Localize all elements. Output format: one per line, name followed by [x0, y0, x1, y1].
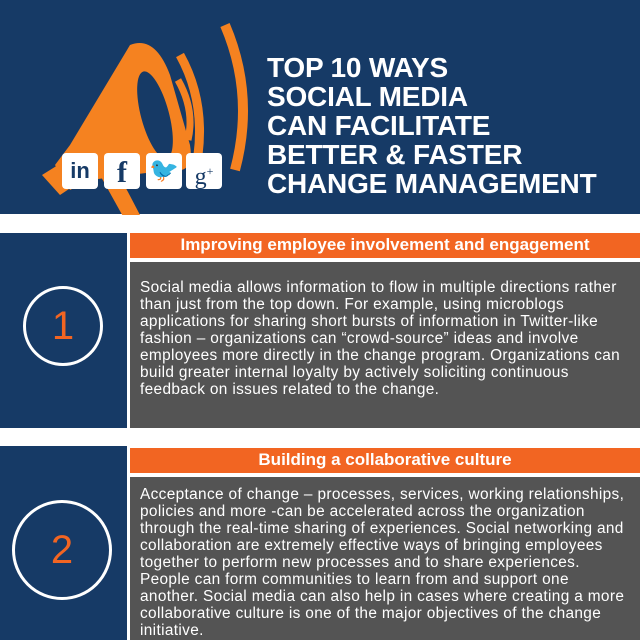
body 1: build greater internal loyalty by actively soliciting continuous: [140, 364, 569, 381]
number 2: [0, 446, 127, 640]
body 2: together to perform new processes and to share experiences.: [140, 554, 580, 571]
body 1: fashion – organizations can “crowd-source” ideas and involve: [140, 330, 578, 347]
header: [0, 0, 640, 214]
body 2: Acceptance of change – processes, services, working relationships,: [140, 486, 624, 503]
panel: item 1: [0, 233, 640, 428]
body 1: applications for sharing short bursts of information in Twitter-like: [140, 313, 598, 330]
body 1: [130, 262, 640, 428]
body 1: employees more directly in the change program. Organizations can: [140, 347, 620, 364]
number 1: [0, 233, 127, 428]
icon: twitter: [146, 153, 182, 189]
body 2: initiative.: [140, 622, 204, 639]
icon: linkedin: [62, 153, 98, 189]
icon: google plus: [186, 153, 222, 189]
icon: google plus: g+: [195, 164, 213, 190]
heading 2: Building a collaborative culture: [258, 450, 512, 469]
icon: linkedin: in: [70, 158, 90, 183]
icon: twitter: 🐦: [149, 157, 179, 184]
title: CAN FACILITATE: [267, 110, 490, 141]
heading 2: [130, 448, 640, 473]
body 2: collaboration are extremely effective ways of bringing employees: [140, 537, 603, 554]
icon: facebook: [104, 153, 140, 189]
title: CHANGE MANAGEMENT: [267, 168, 596, 199]
body 2: through the real-time sharing of experiences. Social networking and: [140, 520, 624, 537]
body 2: People can form communities to learn from and support one: [140, 571, 569, 588]
title: SOCIAL MEDIA: [267, 81, 468, 112]
body 1: than just from the top down. For example, using microblogs: [140, 296, 564, 313]
body 1: feedback on issues related to the change.: [140, 381, 439, 398]
number 2: 2: [51, 528, 73, 572]
icon: facebook: f: [117, 156, 127, 189]
body 2: another. Social media can also help in cases where creating a more: [140, 588, 624, 605]
title: BETTER & FASTER: [267, 139, 522, 170]
body 2: policies and more -can be accelerated across the organization: [140, 503, 585, 520]
title: [267, 52, 596, 199]
body 2: [130, 477, 640, 640]
panel: item 2: [0, 446, 640, 640]
number 1: 1: [52, 304, 74, 348]
title: TOP 10 WAYS: [267, 52, 448, 83]
body 1: Social media allows information to flow in multiple directions rather: [140, 279, 617, 296]
heading 1: Improving employee involvement and engagement: [180, 235, 590, 254]
icon: megaphone: [42, 23, 248, 215]
body 2: collaborative culture is one of the major objectives of the change: [140, 605, 601, 622]
heading 1: [130, 233, 640, 258]
